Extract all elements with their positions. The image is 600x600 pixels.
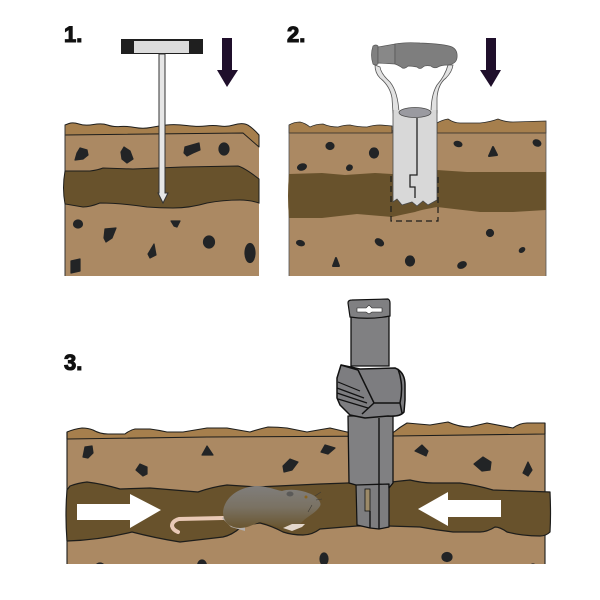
trap clamp face — [341, 365, 402, 414]
grip body — [395, 43, 457, 68]
trap housing seam — [370, 418, 379, 529]
soil left edge — [64, 125, 66, 276]
trap — [337, 299, 405, 529]
tool left strut — [375, 65, 399, 113]
tool slot — [410, 118, 417, 198]
rat body — [223, 486, 321, 528]
infographic: three steps — [63, 26, 552, 564]
burrow tunnel — [64, 166, 259, 208]
tool right strut — [431, 65, 453, 113]
rat — [172, 486, 322, 532]
topsoil strip right — [437, 119, 546, 133]
heading: step 3: 3. — [64, 350, 82, 375]
burrow tunnel — [288, 170, 546, 218]
soil body — [65, 133, 259, 276]
tool plunger disc — [399, 108, 431, 118]
tool tube sides — [393, 110, 437, 206]
grip neck — [378, 44, 395, 64]
soil body — [67, 434, 545, 564]
trap clamp ridges — [337, 382, 368, 408]
trap clamp block — [337, 365, 405, 418]
rat ear — [286, 492, 294, 496]
panel: step 2 coring tool — [287, 22, 546, 276]
burrow tunnel — [66, 480, 550, 542]
rat eye — [304, 496, 308, 498]
heading: step 2: 2. — [287, 22, 305, 47]
arrow: push down — [480, 38, 501, 87]
stones — [296, 139, 542, 270]
trap upper tube — [351, 316, 389, 366]
rat whiskers — [308, 492, 322, 512]
stones — [71, 143, 255, 273]
arrow: left — [418, 492, 501, 526]
arrow: right — [77, 494, 161, 528]
coring tool — [372, 43, 457, 206]
soil edges — [67, 423, 545, 564]
panel: step 3 trap in burrow — [64, 299, 550, 572]
rat hind foot — [222, 516, 245, 531]
trap lower leg — [356, 484, 389, 529]
probe shaft with arrow tip — [158, 54, 168, 203]
heading: step 1: 1. — [64, 22, 82, 47]
rat front foot — [283, 524, 305, 531]
trap lower housing — [348, 416, 393, 488]
stones — [83, 445, 536, 572]
topsoil strip — [65, 123, 259, 147]
topsoil strip — [67, 422, 545, 439]
rat tail — [172, 518, 223, 532]
grip cap — [372, 45, 378, 65]
tool tube — [393, 110, 437, 206]
trap hang hole — [357, 305, 382, 314]
soil body — [289, 130, 546, 276]
probe T handle — [121, 39, 203, 54]
cut outline dashed — [391, 176, 438, 221]
trap hang tab — [348, 299, 390, 318]
topsoil strip left — [289, 122, 392, 133]
panel: step 1 probe — [64, 22, 259, 276]
tool grip — [372, 43, 457, 68]
arrow: push down — [217, 38, 238, 87]
soil edges — [289, 121, 546, 276]
trap leg window — [365, 489, 370, 511]
